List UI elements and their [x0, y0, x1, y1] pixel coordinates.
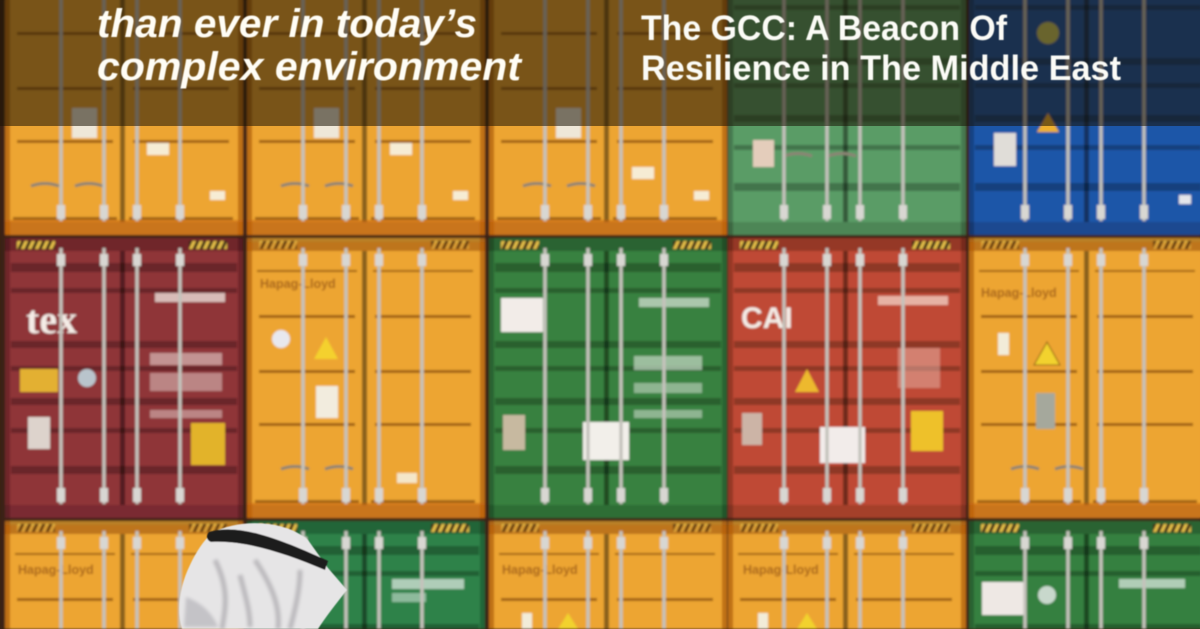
yellow container bottom centre: Hapag-Lloyd [502, 563, 578, 577]
heading: right title [641, 9, 1121, 88]
blue container top row [969, 0, 1200, 235]
middle row of containers [5, 238, 1200, 518]
green container bottom [247, 521, 485, 629]
heading: left tagline: than ever in today’s [97, 2, 477, 46]
heading: right title: Resilience in The Middle East [641, 49, 1121, 88]
yellow container bottom centre right [728, 521, 966, 629]
top row of containers [5, 0, 1200, 235]
green container bottom right [969, 521, 1200, 629]
yellow container bottom left: Hapag-Lloyd [18, 563, 94, 577]
yellow container top row 2 [247, 0, 485, 235]
heading: right title: The GCC: A Beacon Of [641, 9, 1007, 48]
logo: CAI: CAI [741, 302, 793, 335]
green container top row [728, 0, 966, 235]
black agal band [207, 529, 328, 570]
red container middle [728, 238, 966, 518]
maroon container [5, 238, 243, 518]
yellow container bottom left [5, 521, 243, 629]
yellow container top row 3 [489, 0, 727, 235]
figure: man in white headdress [179, 523, 347, 629]
yellow container middle left [247, 238, 485, 518]
yellow container bottom centre right: Hapag-Lloyd [743, 563, 819, 577]
heading: left tagline: complex environment [97, 45, 523, 89]
headdress cloth [179, 523, 347, 629]
logo: tex: tex [26, 297, 77, 342]
heading: left tagline [97, 2, 523, 89]
green container middle [489, 238, 727, 518]
bottom row of containers [5, 521, 1200, 629]
yellow container middle right: Hapag-Lloyd [981, 286, 1057, 300]
yellow container middle left: Hapag-Lloyd [260, 277, 336, 291]
yellow container bottom centre [489, 521, 727, 629]
yellow container middle right [969, 238, 1200, 518]
yellow container top row 1 [5, 0, 243, 235]
dark title banner overlay [0, 0, 1200, 126]
